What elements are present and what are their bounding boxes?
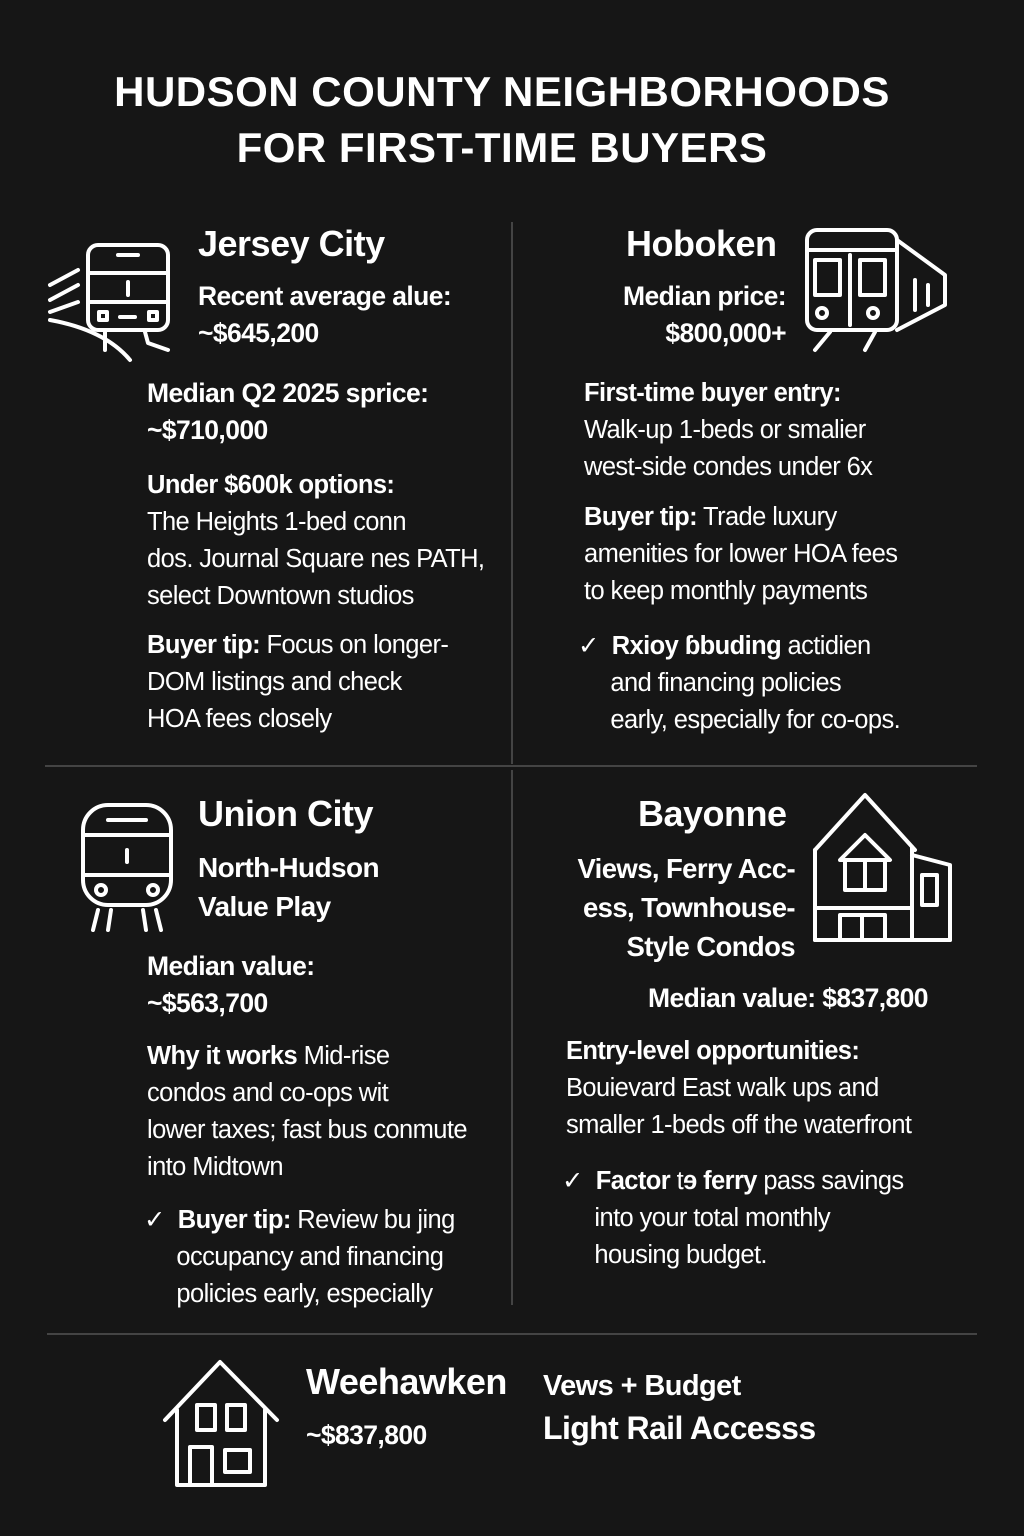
- text: entry: [584, 379, 873, 481]
- text: entry: First-time buyer entry:: [584, 379, 841, 407]
- text: median: Median value: $837,800: [648, 983, 928, 1013]
- text: value: ~$837,800: [306, 1420, 427, 1450]
- text: buyer tip: [584, 503, 898, 605]
- text: under 600k: Under $600k options:: [147, 471, 394, 499]
- text: median price: Median price:: [623, 281, 786, 311]
- subheading: Style Condos: [626, 931, 795, 962]
- text: why it works: [147, 1042, 467, 1181]
- text: entry-level: [566, 1037, 912, 1139]
- title: FOR FIRST-TIME BUYERS: [237, 124, 767, 171]
- text: buyer tip: [147, 631, 448, 733]
- checklist item: ✓ Factor tɘ ferry pass savings: [562, 1167, 904, 1195]
- text: entry-level: Bouievard East walk ups and: [566, 1074, 879, 1102]
- icon: train: [48, 243, 170, 362]
- text: median price: $800,000+: [665, 318, 786, 348]
- text: under 600k: select Downtown studios: [147, 582, 414, 610]
- subheading: [198, 852, 379, 922]
- text: buyer tip: amenities for lower HOA fees: [584, 540, 897, 568]
- heading: Bayonne: [638, 793, 787, 834]
- text: why it works: into Midtown: [147, 1153, 283, 1181]
- panel: Union City: [81, 793, 467, 1308]
- text: tagline: Vews + Budget: [543, 1370, 741, 1402]
- heading: Union City: [198, 793, 373, 834]
- checklist item: [562, 1167, 904, 1269]
- subheading: ess, Townhouse-: [583, 892, 795, 923]
- text: under 600k: [147, 471, 484, 610]
- text: buyer tip: HOA fees closely: [147, 705, 332, 733]
- text: entry-level: Entry-level opportunities:: [566, 1037, 859, 1065]
- panel: Hoboken: [578, 223, 947, 734]
- icon: train side: [805, 228, 947, 352]
- panel: Jersey City: [48, 223, 484, 733]
- text: median: [147, 951, 314, 1018]
- text: entry: Walk-up 1-beds or smalier: [584, 416, 866, 444]
- checklist item: [144, 1206, 455, 1308]
- text: median: ~$563,700: [147, 988, 268, 1018]
- checklist item: housing budget.: [594, 1241, 767, 1269]
- checklist item: into your total monthly: [594, 1204, 830, 1232]
- text: median: ~$710,000: [147, 415, 268, 445]
- text: average value: ~$645,200: [198, 318, 319, 348]
- checklist item: ✓ Buyer tip: Review bu jing: [144, 1206, 455, 1234]
- text: why it works: condos and co-ops wit: [147, 1079, 388, 1107]
- text: average value: Recent average alue:: [198, 281, 451, 311]
- text: median: Median value:: [147, 951, 314, 981]
- icon: train front: [81, 803, 173, 932]
- subheading: [577, 853, 795, 962]
- heading: Hoboken: [626, 223, 777, 264]
- text: buyer tip: to keep monthly payments: [584, 577, 867, 605]
- text: median price: [623, 281, 786, 348]
- text: why it works: Why it works Mid-rise: [147, 1042, 389, 1070]
- checklist item: early, especially for co-ops.: [610, 706, 900, 734]
- text: why it works: lower taxes; fast bus conmute: [147, 1116, 467, 1144]
- checklist item: policies early, especially: [176, 1280, 432, 1308]
- checklist item: and financing policies: [610, 669, 841, 697]
- checklist item: occupancy and financing: [176, 1243, 443, 1271]
- text: entry: west-side condes under 6x: [584, 453, 872, 481]
- text: buyer tip: Buyer tip: Focus on longer-: [147, 631, 448, 659]
- subheading: North-Hudson: [198, 852, 379, 883]
- icon: house: [162, 1360, 280, 1487]
- text: under 600k: dos. Journal Square nes PATH,: [147, 545, 484, 573]
- text: tagline: Light Rail Accesss: [543, 1410, 816, 1446]
- subheading: Views, Ferry Acc-: [577, 853, 795, 884]
- panel: Bayonne: [562, 792, 952, 1269]
- text: median: Median Q2 2025 sprice:: [147, 378, 428, 408]
- heading: Jersey City: [198, 223, 385, 264]
- title: [114, 68, 890, 171]
- text: entry-level: smaller 1-beds off the waterfront: [566, 1111, 911, 1139]
- checklist item: ✓ Rxioy ɓbuding actidien: [578, 632, 871, 660]
- text: median: [147, 378, 428, 445]
- text: buyer tip: DOM listings and check: [147, 668, 402, 696]
- title: HUDSON COUNTY NEIGHBORHOODS: [114, 68, 890, 115]
- text: tagline: [543, 1370, 816, 1446]
- icon: house: [812, 792, 952, 942]
- text: buyer tip: Buyer tip: Trade luxury: [584, 503, 837, 531]
- text: average value: [198, 281, 451, 348]
- checklist item: [578, 632, 900, 734]
- subheading: Value Play: [198, 891, 331, 922]
- text: under 600k: The Heights 1-bed conn: [147, 508, 406, 536]
- panel: Weehawken: [162, 1360, 816, 1487]
- heading: Weehawken: [306, 1361, 507, 1402]
